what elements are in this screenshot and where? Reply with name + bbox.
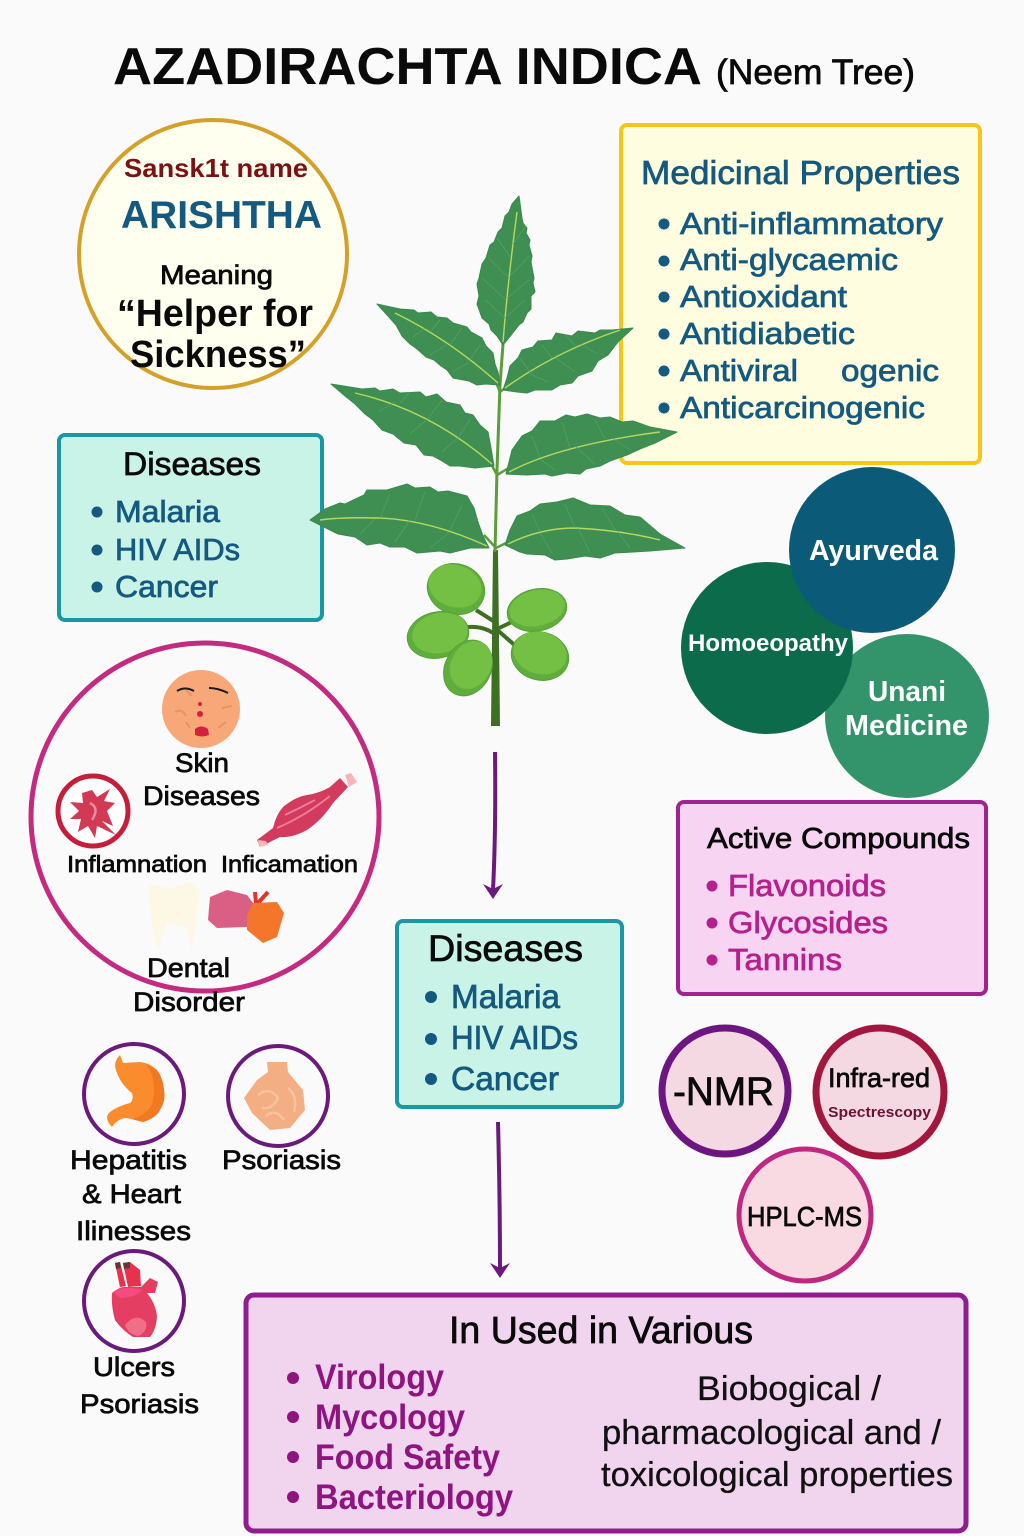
label: hepatitis and heart illnesses: Ilinesses	[76, 1216, 191, 1246]
panel: diseases upper: Cancer	[115, 569, 218, 604]
panel: sanskrit name circle: Sickness”	[130, 334, 306, 376]
venn: Unani Medicine: Medicine	[845, 710, 968, 742]
label: ulcers psoriasis	[80, 1352, 199, 1419]
label: hepatitis and heart illnesses: Hepatitis	[70, 1145, 187, 1175]
badge: NMR	[662, 1028, 788, 1154]
panel: medicinal properties	[621, 125, 980, 463]
panel: active compounds: Active Compounds	[707, 823, 970, 855]
panel: medicinal properties: Anti-inflammatory	[680, 206, 944, 241]
title: AZADIRACHTA INDICA	[113, 38, 702, 96]
panel: sanskrit name circle	[79, 120, 347, 388]
venn: Homoeopathy	[681, 562, 853, 734]
label: inficamation: Inficamation	[221, 851, 358, 877]
panel: active compounds	[678, 802, 986, 994]
panel: diseases center: Malaria	[451, 978, 561, 1015]
leaf upper left	[377, 304, 500, 385]
label: ulcers psoriasis: Ulcers	[93, 1352, 175, 1382]
panel: used in various: In Used in Various	[449, 1310, 753, 1352]
arrow: plant to diseases	[483, 752, 503, 899]
panel: diseases upper: Malaria	[115, 494, 221, 529]
venn: Unani Medicine: Unani	[868, 676, 946, 708]
label: skin diseases: Skin	[175, 748, 229, 778]
panel: used in various: Bacteriology	[315, 1478, 513, 1517]
panel: medicinal properties: ogenic	[841, 353, 939, 388]
venn: Unani Medicine	[825, 634, 989, 798]
panel: used in various: Mycology	[315, 1398, 465, 1437]
panel: diseases center: HIV AIDs	[451, 1019, 578, 1056]
panel: used in various: Virology	[315, 1358, 444, 1397]
leaf middle right	[506, 414, 677, 476]
panel: medicinal properties: Medicinal Properties	[641, 154, 960, 191]
leaf middle left	[331, 384, 494, 468]
panel: sanskrit name circle: Sansk1t name	[124, 153, 308, 183]
panel: skin and related disorders circle	[31, 643, 379, 991]
leaf top	[477, 196, 535, 345]
label: skin diseases: Diseases	[143, 781, 260, 811]
panel: diseases upper	[59, 435, 322, 620]
panel: diseases center	[397, 921, 622, 1107]
leaf lower left	[310, 484, 489, 553]
panel: diseases upper: Diseases	[123, 446, 261, 482]
panel: used in various: Food Safety	[315, 1438, 500, 1477]
fruit cluster	[403, 556, 574, 704]
badge: HPLC-MS: HPLC-MS	[747, 1201, 862, 1232]
icon: skin face	[162, 670, 240, 748]
panel: medicinal properties: Antioxidant	[680, 279, 847, 314]
label: ulcers psoriasis: Psoriasis	[80, 1389, 199, 1419]
icon: heart in circle	[84, 1251, 184, 1351]
icon: tooth	[148, 882, 200, 952]
panel: medicinal properties: Anti-glycaemic	[680, 242, 898, 277]
venn: Ayurveda: Ayurveda	[809, 535, 939, 567]
panel: medicinal properties: Antidiabetic	[680, 316, 855, 351]
panel: medicinal properties: Anticarcinogenic	[680, 390, 925, 425]
leaf lower right	[505, 498, 685, 560]
panel: medicinal properties: Antiviral	[680, 353, 798, 388]
panel: active compounds: Glycosides	[728, 905, 888, 940]
label: hepatitis and heart illnesses	[70, 1145, 191, 1246]
label: inflamnation: Inflamnation	[67, 851, 207, 877]
venn: Homoeopathy: Homoeopathy	[688, 630, 849, 657]
panel: diseases upper: HIV AIDs	[115, 532, 240, 567]
label: psoriasis: Psoriasis	[222, 1145, 341, 1175]
label: dental disorder	[133, 953, 245, 1017]
panel: sanskrit name circle: “Helper for	[117, 293, 313, 335]
leaf upper right	[503, 328, 633, 393]
badge: infra-red spectroscopy: Infra-red	[828, 1063, 930, 1093]
label: dental disorder: Disorder	[133, 987, 245, 1017]
title: (Neem Tree)	[716, 53, 915, 92]
panel: diseases center: Diseases	[428, 928, 583, 969]
icon: skin patch in circle	[228, 1046, 328, 1146]
panel: active compounds: Flavonoids	[728, 868, 886, 903]
venn: Ayurveda	[789, 467, 955, 633]
icon: muscle	[257, 773, 357, 847]
panel: sanskrit name circle: Meaning	[160, 260, 273, 290]
icon: liver and heart	[208, 890, 284, 943]
panel: diseases center: Cancer	[451, 1060, 559, 1097]
panel: used in various	[246, 1295, 966, 1531]
panel: active compounds: Tannins	[728, 942, 842, 977]
label: hepatitis and heart illnesses: & Heart	[82, 1179, 182, 1209]
arrow: diseases to various uses	[490, 1122, 510, 1278]
icon: stomach in circle	[84, 1044, 184, 1144]
label: skin diseases	[143, 748, 260, 811]
panel: used in various: toxicological properties	[601, 1456, 953, 1494]
panel: sanskrit name circle: ARISHTHA	[121, 194, 322, 237]
badge: HPLC-MS	[739, 1149, 871, 1281]
icon: inflammation cell	[58, 776, 128, 846]
panel: used in various: Biobogical /	[697, 1370, 882, 1408]
label: dental disorder: Dental	[147, 953, 230, 983]
badge: infra-red spectroscopy: Spectrescopy	[828, 1104, 932, 1121]
badge: infra-red spectroscopy	[816, 1028, 944, 1156]
badge: NMR: -NMR	[673, 1070, 774, 1114]
neem plant illustration	[310, 196, 685, 726]
panel: used in various: pharmacological and /	[602, 1414, 942, 1452]
